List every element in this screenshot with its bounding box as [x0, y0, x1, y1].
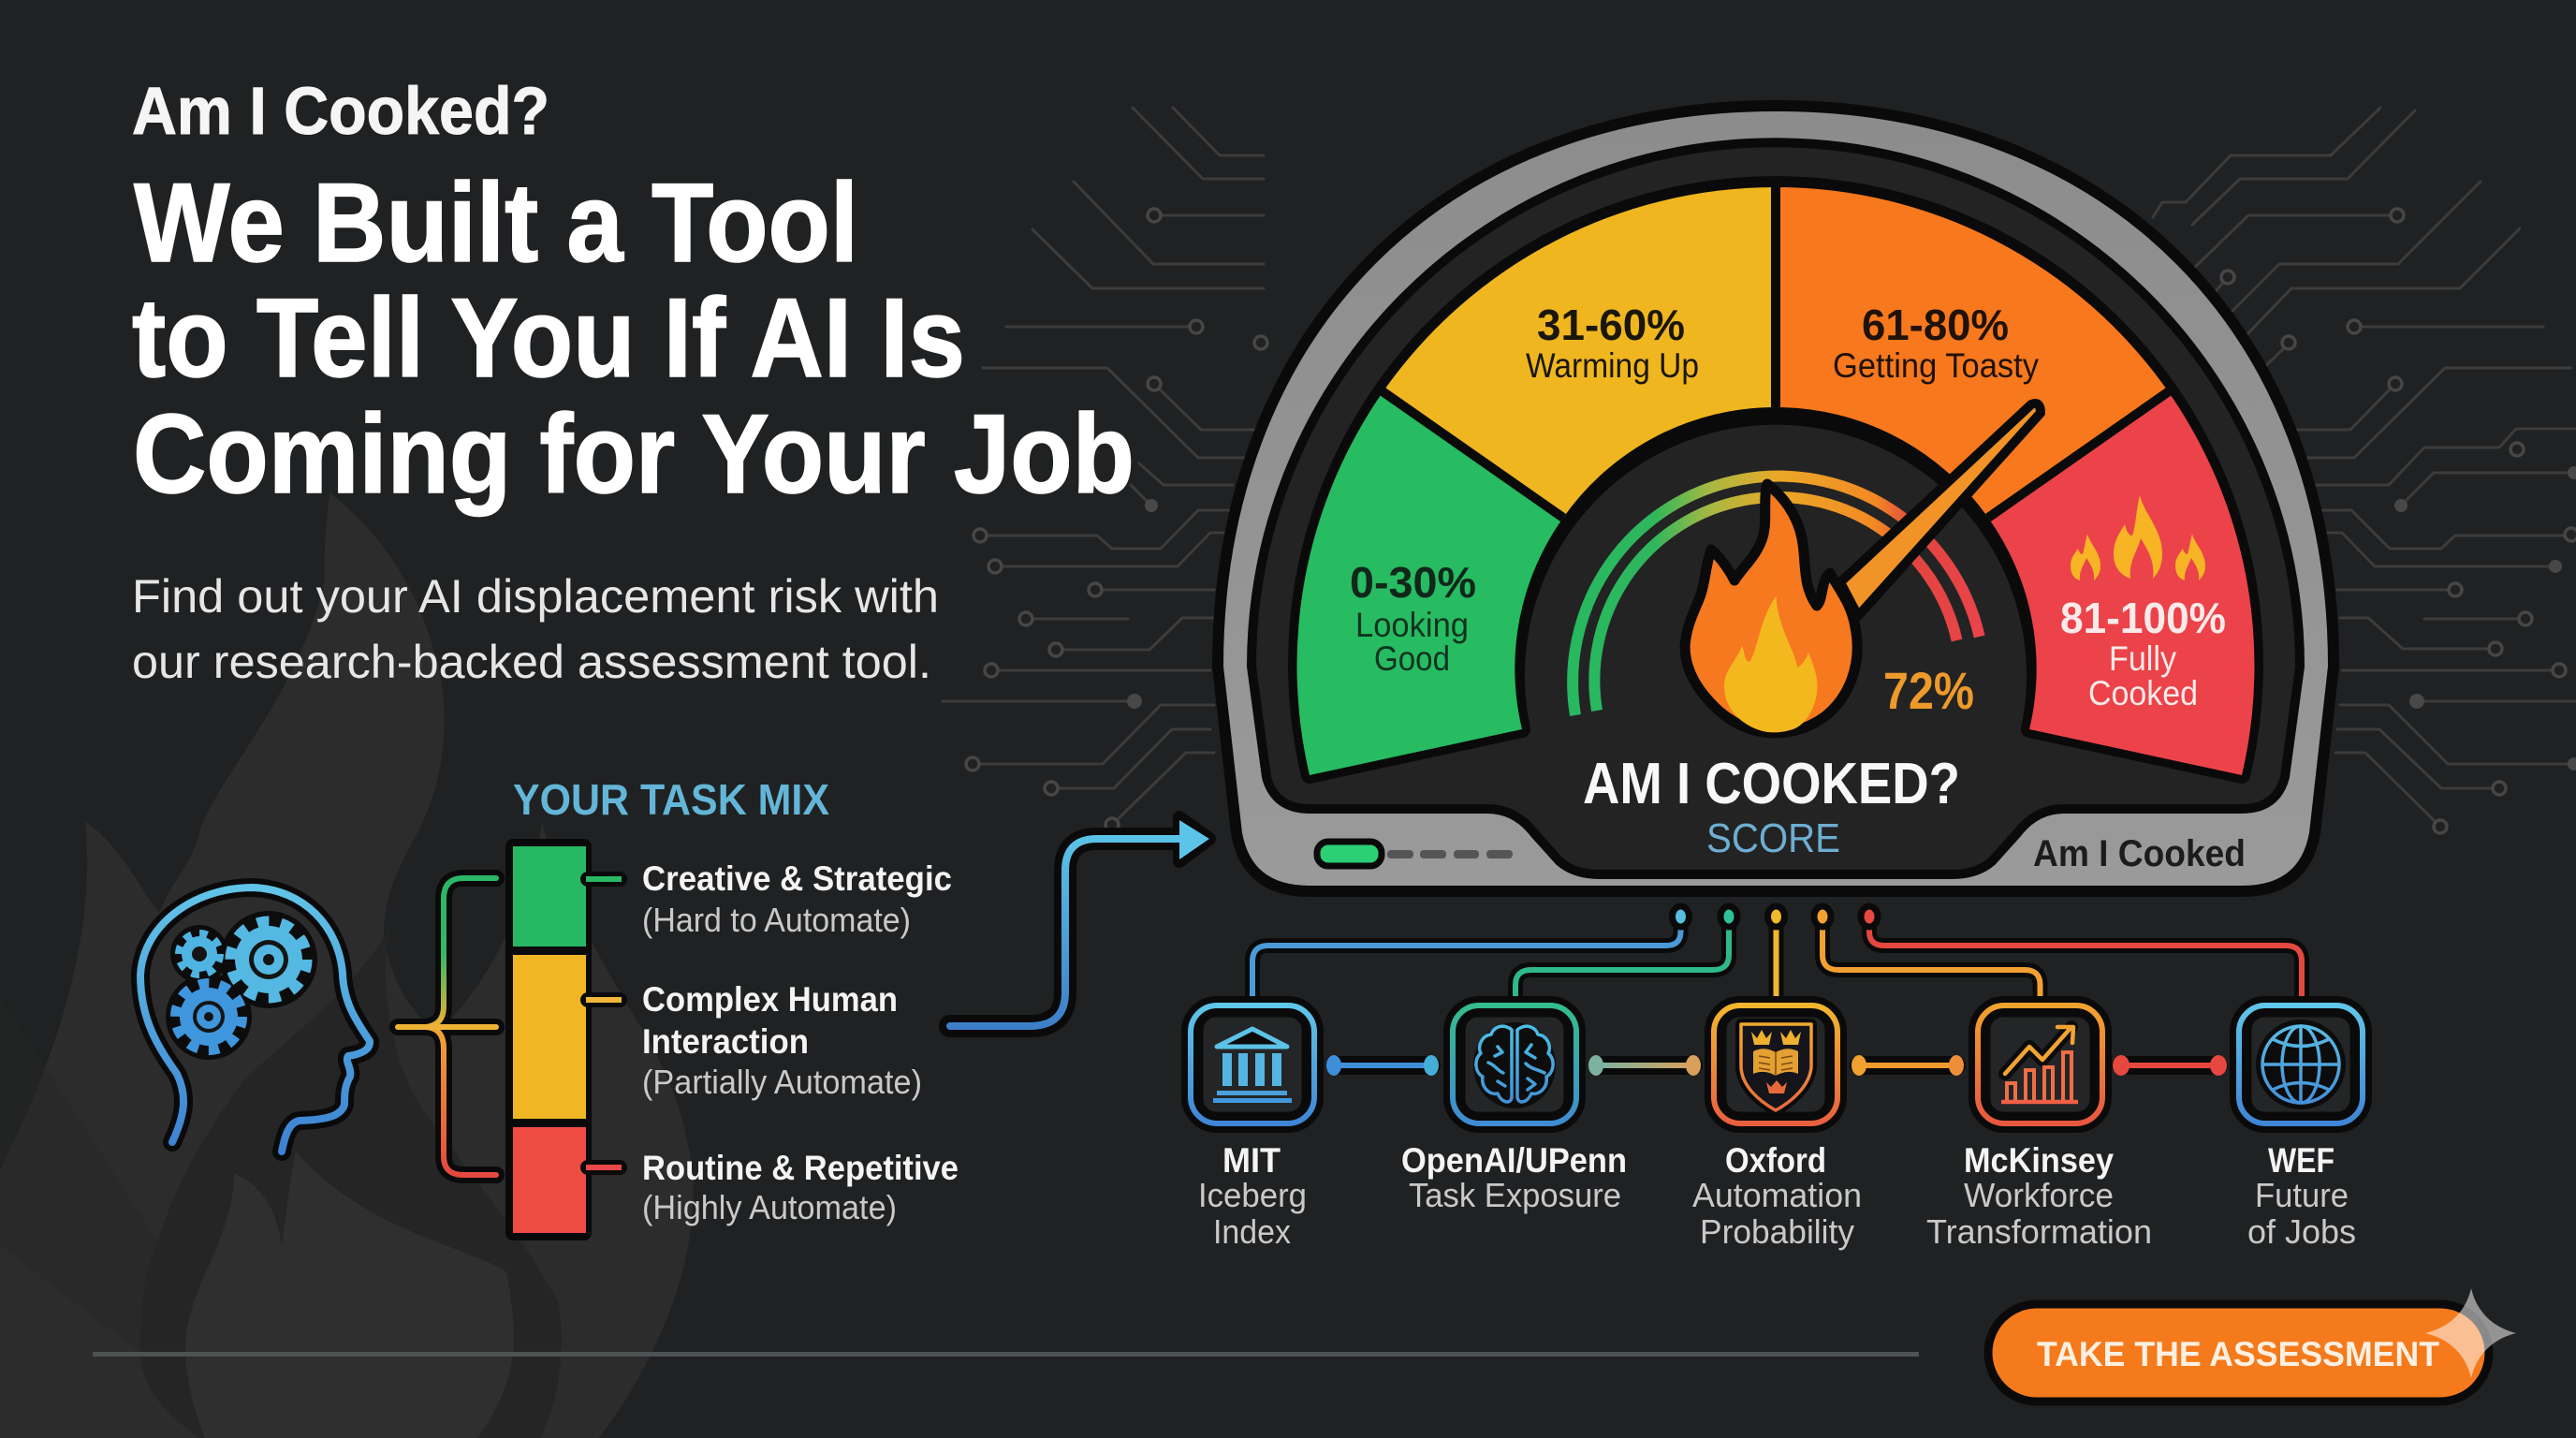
text: Oxford Automation Probability: Probability — [1700, 1212, 1854, 1251]
label: 81-100%: 81-100% — [2060, 594, 2226, 642]
gauge needle — [1840, 404, 2041, 616]
text: OpenAI/UPenn Task Exposure: Task Exposure — [1409, 1176, 1621, 1214]
source connector lines — [1252, 922, 2302, 1002]
source: McKinsey — [1926, 1005, 2152, 1251]
gauge segment backing — [1296, 184, 2255, 775]
label: 81-100% — [2060, 594, 2226, 712]
icon: sparkle — [2425, 1288, 2516, 1378]
main title — [132, 160, 1134, 517]
segment: green — [1297, 391, 1563, 775]
icon: head with gears — [140, 888, 370, 1152]
text: McKinsey Workforce Transformation: McKinsey — [1964, 1141, 2114, 1180]
call to action button — [1988, 1288, 2516, 1401]
icon: institution — [1191, 1005, 1314, 1123]
icon: shield crest — [1714, 1005, 1837, 1123]
label: routine and repetitive: (Highly Automate) — [642, 1188, 897, 1226]
text: WEF Future of Jobs: Future — [2255, 1176, 2349, 1214]
stacked task bar — [505, 839, 622, 1240]
gauge subtitle: SCORE — [1706, 815, 1840, 861]
text: OpenAI/UPenn Task Exposure: OpenAI/UPenn — [1401, 1141, 1627, 1180]
label: 81-100%: Fully — [2109, 639, 2176, 678]
label: creative and strategic: (Hard to Automate) — [642, 901, 911, 939]
label: 61-80%: 61-80% — [1862, 301, 2009, 349]
text: MIT Iceberg Index: Index — [1213, 1212, 1291, 1251]
label: 0-30%: 0-30% — [1350, 558, 1476, 607]
label: 81-100%: Cooked — [2088, 674, 2198, 712]
text: McKinsey Workforce Transformation — [1926, 1141, 2152, 1251]
label: complex human interaction: (Partially Automate) — [642, 1063, 922, 1101]
call to action button: TAKE THE ASSESSMENT — [2037, 1335, 2439, 1373]
segment: red — [1988, 391, 2254, 775]
icon: central flame — [1685, 484, 1857, 733]
label: 0-30% — [1350, 558, 1476, 678]
main title: Coming for Your Job — [133, 391, 1134, 517]
gauge title: AM I COOKED? — [1583, 752, 1960, 816]
text: McKinsey Workforce Transformation: Transformation — [1926, 1212, 2152, 1251]
text: MIT Iceberg Index — [1198, 1141, 1307, 1251]
text: MIT Iceberg Index: MIT — [1222, 1141, 1281, 1180]
subtitle — [132, 570, 939, 688]
label: 0-30%: Looking — [1355, 606, 1469, 644]
text: McKinsey Workforce Transformation: Workforce — [1964, 1176, 2114, 1214]
label: 61-80% — [1833, 301, 2039, 385]
label: creative and strategic — [642, 859, 952, 939]
subtitle: our research-backed assessment tool. — [132, 636, 931, 688]
circuit traces left — [943, 108, 1267, 831]
label: creative and strategic: Creative & Strategic — [642, 859, 952, 898]
text: WEF Future of Jobs — [2247, 1141, 2356, 1251]
text: OpenAI/UPenn Task Exposure — [1401, 1141, 1627, 1214]
gauge inner panel — [1251, 142, 2300, 874]
icon: globe — [2239, 1005, 2363, 1123]
horizontal links between sources — [1326, 1055, 2227, 1076]
source: MIT — [1191, 1005, 1314, 1251]
heading: your task mix: YOUR TASK MIX — [513, 775, 829, 824]
main title: We Built a Tool — [134, 160, 858, 286]
label: 61-80%: Getting Toasty — [1833, 346, 2039, 385]
connector dots — [1672, 906, 1878, 927]
text: Oxford Automation Probability: Oxford — [1725, 1141, 1826, 1180]
label: routine and repetitive: Routine & Repetitive — [642, 1149, 959, 1187]
text: WEF Future of Jobs: WEF — [2268, 1141, 2334, 1180]
circuit traces right — [2153, 108, 2576, 833]
segment: yellow — [1383, 187, 1776, 518]
icon: brain — [1453, 1005, 1576, 1123]
label: complex human interaction — [642, 980, 922, 1101]
label: routine and repetitive — [642, 1149, 959, 1226]
background flame watermark — [0, 492, 694, 1438]
gauge — [1218, 106, 2334, 891]
text: Oxford Automation Probability: Automation — [1692, 1176, 1862, 1214]
bracket connector — [398, 878, 496, 1175]
source: Oxford — [1692, 1005, 1862, 1251]
label: complex human interaction: Interaction — [642, 1022, 809, 1061]
score arc track — [1573, 477, 1980, 715]
text: WEF Future of Jobs: of Jobs — [2247, 1212, 2356, 1251]
source: OpenAI/UPenn — [1401, 1005, 1627, 1214]
label: 31-60%: 31-60% — [1537, 301, 1685, 349]
value: 72%: 72% — [1883, 661, 1974, 720]
divider line — [93, 1352, 1919, 1357]
icon: growth chart — [1978, 1005, 2102, 1123]
text: MIT Iceberg Index: Iceberg — [1198, 1176, 1307, 1214]
status indicator — [1317, 842, 1513, 866]
label: 31-60% — [1526, 301, 1699, 385]
subtitle: Find out your AI displacement risk with — [132, 570, 939, 623]
gauge bezel — [1218, 106, 2334, 891]
text: Oxford Automation Probability — [1692, 1141, 1862, 1251]
label: 31-60%: Warming Up — [1526, 346, 1699, 385]
icon: three small flames — [2071, 495, 2205, 580]
arrow to gauge — [950, 817, 1209, 1026]
label: complex human interaction: Complex Human — [642, 980, 898, 1019]
gauge brand label: Am I Cooked — [2033, 833, 2246, 874]
source: WEF — [2239, 1005, 2363, 1251]
label: 0-30%: Good — [1374, 639, 1450, 678]
segment: orange — [1776, 187, 2168, 518]
eyebrow heading: Am I Cooked? — [132, 75, 549, 149]
segment dividers — [1380, 183, 2172, 518]
main title: to Tell You If AI Is — [132, 275, 965, 401]
